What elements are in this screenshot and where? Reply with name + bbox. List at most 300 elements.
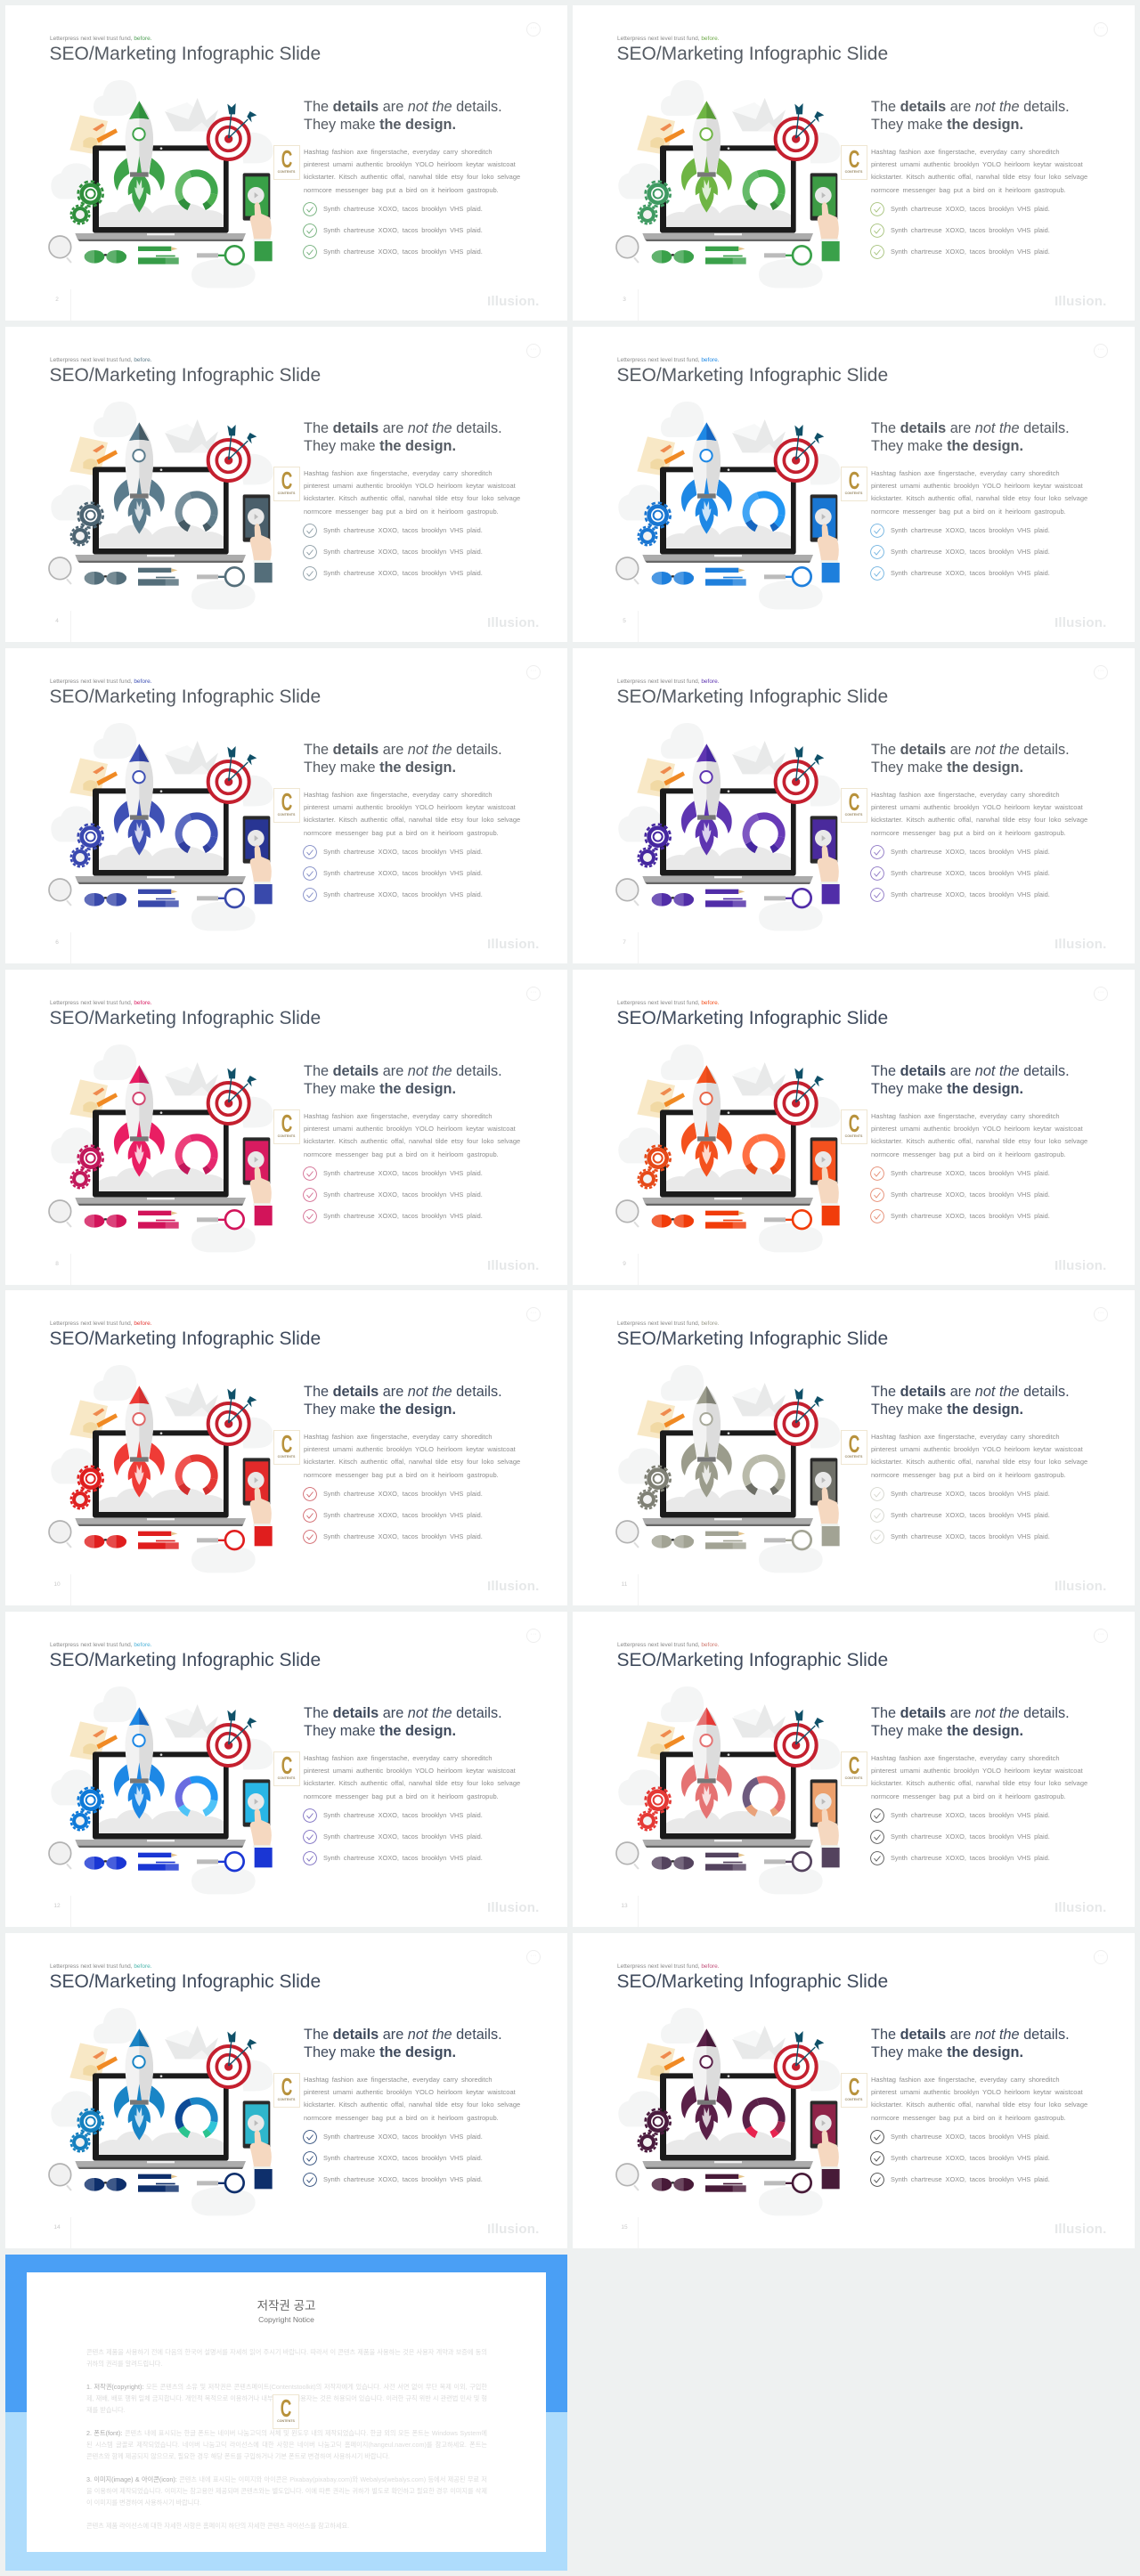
checklist: Synth chartreuse XOXO, tacos brooklyn VHS plaid. — [323, 1169, 483, 1177]
icon: glasses — [652, 1535, 694, 1548]
body text: pinterest umami authentic brooklyn YOLO heirloom keytar waistcoat — [871, 2088, 1083, 2096]
checklist: Synth chartreuse XOXO, tacos brooklyn VHS plaid. — [323, 1212, 483, 1220]
icon: gears — [71, 182, 103, 223]
title: SEO/Marketing Infographic Slide — [50, 365, 321, 385]
heading — [304, 420, 502, 454]
checklist — [870, 202, 1050, 259]
brand: Illusion. — [487, 1579, 539, 1594]
body text: kickstarter. Kitsch authentic offal, narwhal tilde etsy four loko selvage — [871, 494, 1087, 502]
checklist — [303, 1166, 483, 1223]
icon: target — [208, 103, 256, 159]
icon: phone — [810, 494, 837, 542]
body text — [304, 791, 520, 837]
title: SEO/Marketing Infographic Slide — [616, 43, 888, 64]
icon: target — [776, 2031, 824, 2087]
icon: glasses — [652, 250, 694, 264]
icon: lens — [616, 1200, 639, 1227]
icon: loupe — [764, 1852, 811, 1871]
menu icon: ··· — [531, 989, 536, 995]
icon: phone — [243, 2101, 270, 2149]
icon: target — [208, 1068, 256, 1124]
badge: C — [848, 1109, 859, 1137]
body text — [871, 468, 1087, 516]
badge — [841, 467, 867, 501]
body text: Hashtag fashion axe fingerstache, everyday carry shoreditch — [304, 1754, 493, 1761]
heading: The details are not the details. — [871, 420, 1070, 436]
badge — [273, 788, 299, 823]
menu icon — [1094, 22, 1108, 37]
icon: lens — [49, 1842, 71, 1869]
icon: laptop — [642, 145, 813, 241]
chart: donut — [746, 2101, 782, 2134]
icon: target — [208, 746, 256, 802]
icon: rocket — [114, 1386, 165, 1498]
icon: target — [776, 1710, 824, 1766]
illustration — [603, 1338, 870, 1579]
icon: pens — [705, 890, 746, 907]
body text: normcore messenger bag put a bird on it heirloom gastropub. — [871, 1471, 1066, 1479]
badge — [273, 1430, 299, 1465]
chart: donut — [746, 816, 782, 849]
body text: normcore messenger bag put a bird on it heirloom gastropub. — [304, 1150, 499, 1158]
title: SEO/Marketing Infographic Slide — [616, 686, 888, 707]
checklist: Synth chartreuse XOXO, tacos brooklyn VHS plaid. — [891, 526, 1050, 534]
heading: The details are not the details. — [304, 1063, 502, 1079]
checklist: Synth chartreuse XOXO, tacos brooklyn VHS plaid. — [323, 1811, 483, 1819]
eyebrow: Letterpress next level trust fund, before. — [617, 357, 720, 363]
icon: gears — [639, 2109, 671, 2151]
slide 3: slate — [5, 327, 567, 642]
checklist: Synth chartreuse XOXO, tacos brooklyn VHS plaid. — [323, 205, 483, 213]
icon: phone — [810, 1779, 837, 1827]
font clause: 된 시스템 글꼴로 제작되었습니다. 네이버 나눔고딕 라이선스에 대한 사항은 네이버 나눔고딕 홈페이지(hangeul.naver.com)를 참고하세요. 폰트는 — [86, 2441, 487, 2449]
checklist: Synth chartreuse XOXO, tacos brooklyn VHS plaid. — [891, 1511, 1050, 1519]
heading: The details are not the details. — [871, 741, 1070, 757]
chart: donut — [179, 1779, 215, 1813]
body text: Hashtag fashion axe fingerstache, everyday carry shoreditch — [871, 791, 1060, 798]
icon: phone — [810, 173, 837, 221]
eyebrow: Letterpress next level trust fund, before. — [617, 1963, 720, 1970]
icon: laptop — [642, 1109, 813, 1206]
icon: rocket — [681, 1065, 732, 1177]
menu icon: ··· — [1097, 25, 1104, 31]
checklist — [303, 202, 483, 259]
badge: CONTENTS — [845, 2098, 862, 2101]
eyebrow: Letterpress next level trust fund, before. — [50, 357, 152, 363]
badge — [841, 1109, 867, 1144]
icon: laptop — [642, 1430, 813, 1526]
badge: C — [848, 467, 859, 494]
icon: hand — [250, 1487, 273, 1546]
chart: donut — [746, 1779, 782, 1813]
icon: pens — [138, 1532, 179, 1549]
heading — [304, 741, 502, 775]
eyebrow: Letterpress next level trust fund, before. — [617, 1321, 720, 1327]
icon: rocket — [681, 1386, 732, 1498]
heading: The details are not the details. — [304, 98, 502, 114]
badge — [273, 145, 299, 180]
checklist — [303, 1487, 481, 1542]
icon: pens — [705, 1211, 746, 1229]
slide 2: olive green — [573, 5, 1135, 321]
icon: phone — [243, 494, 270, 542]
badge: CONTENTS — [278, 492, 295, 495]
body text: kickstarter. Kitsch authentic offal, narwhal tilde etsy four loko selvage — [871, 1458, 1087, 1466]
icon: lens — [49, 1200, 71, 1227]
badge: C — [848, 1430, 859, 1458]
icon: phone — [810, 1137, 837, 1185]
illustration — [36, 1660, 303, 1900]
body text — [304, 468, 520, 516]
brand: Illusion. — [1054, 615, 1106, 630]
icon: pens — [705, 2174, 746, 2192]
icon: gears — [71, 1467, 103, 1508]
badge: C — [281, 145, 292, 173]
page number: 15 — [621, 2224, 628, 2231]
icon: phone — [243, 1458, 270, 1506]
title: SEO/Marketing Infographic Slide — [50, 686, 321, 707]
chart: donut — [746, 1137, 782, 1171]
icon: lens — [616, 1521, 639, 1548]
icon: hand — [818, 845, 840, 904]
icon: phone — [243, 173, 270, 221]
icon: glasses — [652, 572, 694, 585]
body text — [871, 148, 1087, 194]
heading: The details are not the details. — [871, 2027, 1070, 2043]
icon: laptop — [642, 467, 813, 563]
slide 13: teal and navy — [5, 1933, 567, 2248]
icon: lens — [49, 1521, 71, 1548]
body text — [871, 791, 1087, 837]
illustration — [615, 1044, 841, 1252]
checklist: Synth chartreuse XOXO, tacos brooklyn VHS plaid. — [891, 848, 1050, 856]
icon: laptop — [75, 145, 246, 241]
icon: loupe — [764, 2174, 811, 2192]
icon: loupe — [197, 1210, 244, 1229]
body text: pinterest umami authentic brooklyn YOLO heirloom keytar waistcoat — [304, 2088, 516, 2096]
body text: pinterest umami authentic brooklyn YOLO heirloom keytar waistcoat — [304, 1445, 516, 1453]
page number: 10 — [53, 1581, 61, 1588]
body text: pinterest umami authentic brooklyn YOLO heirloom keytar waistcoat — [304, 482, 516, 490]
illustration — [615, 402, 841, 609]
icon: loupe — [197, 246, 244, 264]
icon: phone — [243, 1779, 270, 1827]
body text: pinterest umami authentic brooklyn YOLO heirloom keytar waistcoat — [304, 1125, 516, 1133]
checklist: Synth chartreuse XOXO, tacos brooklyn VHS plaid. — [891, 1490, 1050, 1498]
copyright subheading: Copyright Notice — [258, 2315, 314, 2324]
heading — [871, 1063, 1070, 1097]
icon: loupe — [197, 1531, 244, 1549]
slide 8: orange — [573, 970, 1135, 1285]
body text: kickstarter. Kitsch authentic offal, narwhal tilde etsy four loko selvage — [304, 173, 520, 181]
body text: normcore messenger bag put a bird on it heirloom gastropub. — [304, 1792, 499, 1800]
slide 7: pink — [5, 970, 567, 1285]
icon: loupe — [197, 567, 244, 586]
body text: normcore messenger bag put a bird on it heirloom gastropub. — [304, 186, 499, 194]
body text: kickstarter. Kitsch authentic offal, narwhal tilde etsy four loko selvage — [304, 1137, 520, 1145]
body text: Hashtag fashion axe fingerstache, everyday carry shoreditch — [871, 2075, 1060, 2084]
badge: C — [848, 2073, 859, 2101]
icon: gears — [639, 825, 671, 866]
font clause — [86, 2427, 487, 2462]
title: SEO/Marketing Infographic Slide — [616, 1971, 888, 1991]
icon: pens — [705, 1853, 746, 1871]
checklist: Synth chartreuse XOXO, tacos brooklyn VHS plaid. — [323, 869, 483, 877]
icon: hand — [250, 1808, 273, 1867]
body text: kickstarter. Kitsch authentic offal, narwhal tilde etsy four loko selvage — [871, 173, 1087, 181]
brand: Illusion. — [1054, 2222, 1106, 2237]
brand: Illusion. — [1054, 1579, 1106, 1594]
body text: normcore messenger bag put a bird on it heirloom gastropub. — [871, 508, 1066, 516]
checklist: Synth chartreuse XOXO, tacos brooklyn VHS plaid. — [891, 869, 1050, 877]
body text: pinterest umami authentic brooklyn YOLO heirloom keytar waistcoat — [871, 482, 1083, 490]
badge: CONTENTS — [845, 813, 862, 817]
icon: hand — [250, 202, 273, 261]
menu icon: ··· — [1097, 989, 1104, 995]
body text: Hashtag fashion axe fingerstache, everyday carry shoreditch — [304, 2075, 493, 2084]
copyright clause: 1. 저작권(copyright): 모든 콘텐츠의 소유 및 저작권은 콘텐츠메이트(Contentstoolkit)의 저작자에게 있습니다. 사전 서면 없이 무단 복제 이외, 구입한 — [86, 2383, 487, 2391]
icon: pens — [705, 568, 746, 586]
body text: Hashtag fashion axe fingerstache, everyday carry shoreditch — [304, 1111, 493, 1120]
heading: The details are not the details. — [304, 420, 502, 436]
icon: target — [208, 1388, 256, 1444]
badge: CONTENTS — [278, 813, 295, 817]
checklist: Synth chartreuse XOXO, tacos brooklyn VHS plaid. — [323, 1490, 483, 1498]
slide 1: green — [5, 5, 567, 321]
icon: lens — [49, 557, 71, 584]
icon: glasses — [85, 572, 126, 585]
icon: note — [69, 1079, 118, 1119]
icon: hand — [818, 1487, 840, 1546]
body text: Hashtag fashion axe fingerstache, everyday carry shoreditch — [304, 148, 493, 155]
icon: loupe — [764, 567, 811, 586]
chart: donut — [179, 173, 215, 207]
body text: kickstarter. Kitsch authentic offal, narwhal tilde etsy four loko selvage — [871, 1137, 1087, 1145]
checklist: Synth chartreuse XOXO, tacos brooklyn VHS plaid. — [891, 205, 1050, 213]
heading — [871, 420, 1070, 454]
checklist: Synth chartreuse XOXO, tacos brooklyn VHS plaid. — [323, 1532, 483, 1540]
checklist — [303, 2130, 481, 2185]
checklist: Synth chartreuse XOXO, tacos brooklyn VHS plaid. — [891, 2154, 1050, 2162]
icon: phone — [243, 816, 270, 864]
icon: loupe — [197, 889, 244, 907]
badge — [273, 1751, 299, 1786]
icon: target — [776, 1388, 824, 1444]
icon: lens — [616, 557, 639, 584]
icon: note — [637, 1400, 685, 1440]
illustration — [48, 80, 273, 288]
body text: normcore messenger bag put a bird on it heirloom gastropub. — [871, 1792, 1066, 1800]
icon: hand — [250, 524, 273, 582]
icon: target — [776, 746, 824, 802]
illustration — [615, 723, 841, 931]
eyebrow: Letterpress next level trust fund, before. — [50, 1321, 152, 1327]
checklist — [870, 1808, 1048, 1864]
menu icon: ··· — [531, 346, 536, 353]
heading — [871, 1704, 1070, 1740]
page number: 7 — [623, 939, 626, 946]
heading: They make the design. — [871, 1722, 1023, 1738]
body text: Hashtag fashion axe fingerstache, everyday carry shoreditch — [304, 791, 493, 798]
heading — [871, 1382, 1070, 1418]
slide 4: blue — [573, 327, 1135, 642]
body text: pinterest umami authentic brooklyn YOLO heirloom keytar waistcoat — [871, 1767, 1083, 1775]
checklist — [870, 2130, 1048, 2185]
copyright heading: 저작권 공고 — [257, 2299, 315, 2312]
checklist: Synth chartreuse XOXO, tacos brooklyn VHS plaid. — [323, 2133, 483, 2141]
icon: rocket — [681, 101, 732, 213]
title: SEO/Marketing Infographic Slide — [616, 365, 888, 385]
icon: rocket — [114, 1707, 165, 1819]
page number: 9 — [623, 1261, 626, 1267]
badge: CONTENTS — [845, 170, 862, 174]
heading — [304, 1704, 502, 1740]
checklist: Synth chartreuse XOXO, tacos brooklyn VHS plaid. — [891, 1169, 1050, 1177]
icon: pens — [705, 247, 746, 264]
icon: laptop — [75, 1751, 246, 1848]
chart: donut — [746, 494, 782, 528]
body text: kickstarter. Kitsch authentic offal, narwhal tilde etsy four loko selvage — [304, 2101, 520, 2109]
brand: Illusion. — [1054, 937, 1106, 952]
badge: CONTENTS — [277, 2419, 295, 2423]
menu icon: ··· — [531, 668, 536, 674]
title: SEO/Marketing Infographic Slide — [616, 1008, 888, 1028]
icon: gears — [639, 1788, 671, 1830]
page number: 13 — [621, 1903, 628, 1909]
chart: donut — [179, 1458, 215, 1491]
brand: Illusion. — [1054, 294, 1106, 309]
icon: glasses — [85, 2178, 126, 2191]
icon: target — [776, 103, 824, 159]
checklist: Synth chartreuse XOXO, tacos brooklyn VHS plaid. — [323, 1511, 483, 1519]
badge — [841, 788, 867, 823]
heading: The details are not the details. — [304, 2027, 502, 2043]
badge — [273, 1109, 299, 1144]
heading: They make the design. — [304, 759, 456, 775]
checklist: Synth chartreuse XOXO, tacos brooklyn VHS plaid. — [891, 1811, 1050, 1819]
menu icon: ··· — [531, 1953, 536, 1959]
icon: gears — [639, 182, 671, 223]
menu icon: ··· — [1097, 1631, 1104, 1637]
illustration — [603, 1660, 870, 1900]
chart: donut — [179, 2101, 215, 2134]
title: SEO/Marketing Infographic Slide — [616, 1649, 888, 1670]
body text: Hashtag fashion axe fingerstache, everyday carry shoreditch — [871, 1754, 1060, 1761]
checklist: Synth chartreuse XOXO, tacos brooklyn VHS plaid. — [323, 890, 483, 898]
body text — [304, 1752, 520, 1803]
badge — [841, 2073, 867, 2108]
menu icon: ··· — [1097, 346, 1104, 353]
title: SEO/Marketing Infographic Slide — [50, 1008, 321, 1028]
body text: kickstarter. Kitsch authentic offal, narwhal tilde etsy four loko selvage — [871, 1779, 1087, 1787]
illustration — [36, 1338, 303, 1579]
body text: normcore messenger bag put a bird on it heirloom gastropub. — [304, 1471, 499, 1479]
menu icon: ··· — [531, 25, 536, 31]
badge: C — [281, 1109, 292, 1137]
icon: note — [637, 115, 685, 155]
icon: note — [69, 2043, 118, 2083]
icon: phone — [810, 1458, 837, 1506]
image clause: 이 이미지를 변경하여 사용하시기 바랍니다. — [86, 2499, 201, 2507]
heading: The details are not the details. — [304, 1384, 502, 1400]
icon: glasses — [652, 1857, 694, 1870]
title: SEO/Marketing Infographic Slide — [50, 1329, 321, 1348]
badge: CONTENTS — [845, 1134, 862, 1138]
checklist: Synth chartreuse XOXO, tacos brooklyn VHS plaid. — [891, 2175, 1050, 2183]
icon: target — [208, 425, 256, 481]
badge: C — [281, 467, 292, 494]
checklist — [870, 524, 1050, 581]
checklist: Synth chartreuse XOXO, tacos brooklyn VHS plaid. — [891, 548, 1050, 556]
icon: gears — [71, 1788, 103, 1830]
heading: The details are not the details. — [304, 741, 502, 757]
body text: pinterest umami authentic brooklyn YOLO heirloom keytar waistcoat — [871, 1125, 1083, 1133]
badge: C — [848, 145, 859, 173]
icon: lens — [49, 2164, 71, 2190]
body text: normcore messenger bag put a bird on it heirloom gastropub. — [871, 186, 1066, 194]
body text — [871, 1430, 1087, 1482]
heading: They make the design. — [304, 2044, 456, 2060]
icon: glasses — [85, 1535, 126, 1548]
icon: note — [637, 1079, 685, 1119]
eyebrow: Letterpress next level trust fund, before. — [50, 36, 152, 42]
icon: lens — [616, 879, 639, 906]
checklist — [870, 1166, 1050, 1223]
body text — [304, 2073, 520, 2125]
checklist: Synth chartreuse XOXO, tacos brooklyn VHS plaid. — [323, 248, 483, 256]
icon: note — [637, 2043, 685, 2083]
badge — [273, 2394, 299, 2429]
icon: note — [69, 436, 118, 476]
icon: pens — [138, 247, 179, 264]
heading: The details are not the details. — [304, 1704, 502, 1720]
badge: C — [848, 788, 859, 816]
icon: note — [69, 1400, 118, 1440]
checklist: Synth chartreuse XOXO, tacos brooklyn VHS plaid. — [323, 569, 483, 577]
icon: rocket — [114, 2028, 165, 2141]
body text: normcore messenger bag put a bird on it heirloom gastropub. — [304, 2114, 499, 2122]
illustration — [48, 1044, 273, 1252]
checklist: Synth chartreuse XOXO, tacos brooklyn VHS plaid. — [891, 1212, 1050, 1220]
menu icon: ··· — [1097, 668, 1104, 674]
body text: pinterest umami authentic brooklyn YOLO heirloom keytar waistcoat — [871, 160, 1083, 168]
badge: C — [281, 2073, 292, 2101]
slide 6: purple — [573, 648, 1135, 963]
menu icon — [1094, 1629, 1108, 1643]
heading: They make the design. — [304, 116, 456, 132]
eyebrow: Letterpress next level trust fund, before. — [50, 679, 152, 685]
intro paragraph: 귀하의 권리를 알려드립니다. — [86, 2360, 162, 2368]
menu icon: ··· — [531, 1631, 536, 1637]
icon: note — [637, 758, 685, 798]
eyebrow: Letterpress next level trust fund, before. — [50, 1963, 152, 1970]
badge: C — [281, 1751, 292, 1779]
icon: lens — [49, 879, 71, 906]
checklist: Synth chartreuse XOXO, tacos brooklyn VHS plaid. — [891, 1190, 1050, 1199]
title: SEO/Marketing Infographic Slide — [616, 1329, 888, 1348]
icon: hand — [250, 845, 273, 904]
heading: They make the design. — [304, 1722, 456, 1738]
heading: The details are not the details. — [871, 1384, 1070, 1400]
page number: 14 — [53, 2224, 61, 2231]
icon: gears — [71, 1146, 103, 1188]
heading: They make the design. — [871, 2044, 1023, 2060]
icon: pens — [138, 568, 179, 586]
page number: 3 — [623, 297, 626, 303]
body text: pinterest umami authentic brooklyn YOLO heirloom keytar waistcoat — [304, 1767, 516, 1775]
body text: pinterest umami authentic brooklyn YOLO heirloom keytar waistcoat — [304, 803, 516, 811]
badge — [273, 467, 299, 501]
